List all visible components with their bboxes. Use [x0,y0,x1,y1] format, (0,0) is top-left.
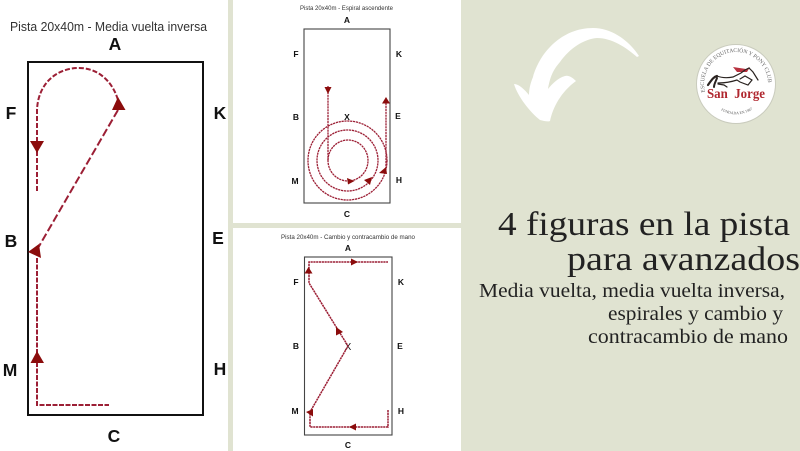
panel: cambio y contracambio de mano [233,228,461,451]
arena letters: M [291,176,299,186]
arena letters: F [293,49,299,59]
heading: espiral ascendente: Pista 20x40m - Espiral ascendente [300,5,393,12]
arena letters: B [5,231,17,251]
logo ring text: ESCUELA DE EQUITACIÓN Y PONY CLUB [700,48,772,93]
heading: media vuelta inversa: Pista 20x40m - Media vuelta inversa [10,20,207,34]
logo name: San Jorge [707,87,765,102]
arena letters: A [344,15,350,25]
text block: description: Media vuelta, media vuelta inversa, [479,280,785,302]
arena letters: H [214,359,226,379]
arena letters: H [398,406,404,416]
arena letters: F [293,277,299,287]
arena letters: H [396,175,402,185]
text block: description [479,280,788,348]
icon: white curved arrow [514,28,639,121]
arena letters: K [396,49,403,59]
panel: media vuelta inversa [0,0,228,451]
direction arrows [304,258,358,430]
arena letters: E [212,228,224,248]
arena letters: E [397,341,403,351]
heading: main title: para avanzados [567,241,800,278]
arena letters [291,243,405,450]
route: change of rein [309,262,388,427]
route: half turn in reverse [37,68,118,405]
arena letters: C [344,209,350,219]
arena letters: C [108,426,121,446]
route: ascending spiral [308,86,387,200]
heading: cambio y contracambio: Pista 20x40m - Cambio y contracambio de mano [281,234,415,241]
logo founded text: FUNDADA EN 1987 [721,107,752,114]
arena letters: X [345,342,352,353]
arena rectangle [28,62,203,415]
text block: description: contracambio de mano [588,326,788,348]
panel: espiral ascendente [233,0,461,223]
direction arrows [28,97,126,363]
arena letters: K [214,103,227,123]
arena letters [291,15,403,219]
arena letters: K [398,277,405,287]
arena letters: C [345,440,351,450]
arena letters: F [6,103,17,123]
arena letters: A [345,243,351,253]
arena letters: M [3,360,17,380]
arena letters [3,34,227,446]
direction arrows [324,87,390,185]
arena letters: B [293,341,299,351]
arena rectangle [304,257,392,435]
arena letters: A [109,34,122,54]
heading: main title: 4 figuras en la pista [498,206,790,243]
panel: right text panel [479,28,800,348]
arena letters: X [344,112,350,122]
text block: description: espirales y cambio y [608,303,783,325]
arena letters: M [291,406,299,416]
heading: main title [498,206,800,278]
logo horse and rider [708,67,758,87]
arena rectangle [304,29,390,203]
arena letters: B [293,112,299,122]
logo: San Jorge [696,44,776,124]
arena letters: E [395,111,401,121]
